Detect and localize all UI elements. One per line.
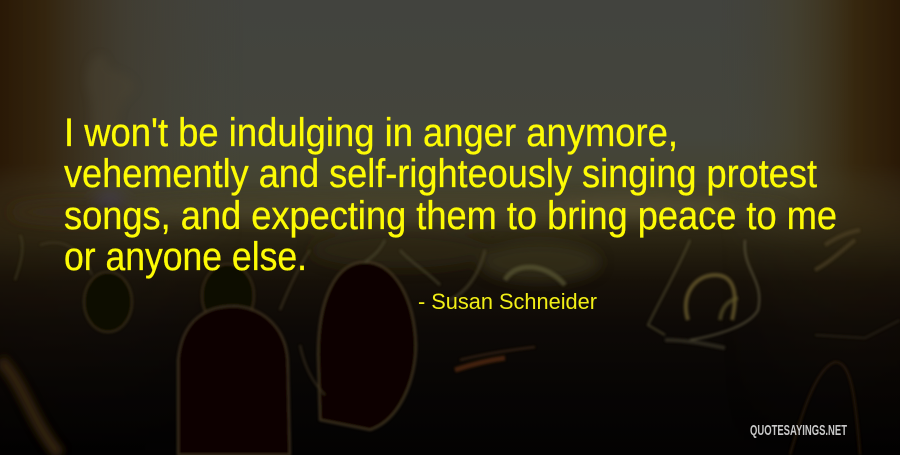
attribution: - Susan Schneider	[418, 289, 597, 314]
crowd head silhouettes with rim light	[15, 235, 440, 455]
quote text	[64, 111, 837, 279]
watermark: QUOTESAYINGS.NET	[750, 422, 847, 439]
quote line 2: vehemently and self-righteously singing protest	[64, 152, 817, 196]
quote line 4: or anyone else.	[64, 235, 307, 279]
quote line 3: songs, and expecting them to bring peace to me	[64, 194, 837, 238]
quote line 1: I won't be indulging in anger anymore,	[64, 111, 678, 155]
raised hand silhouette, top left	[87, 55, 136, 130]
distant crowd glow band	[10, 191, 790, 282]
orange streak bottom left	[0, 360, 60, 455]
right crowd: arms and heads	[450, 230, 900, 455]
